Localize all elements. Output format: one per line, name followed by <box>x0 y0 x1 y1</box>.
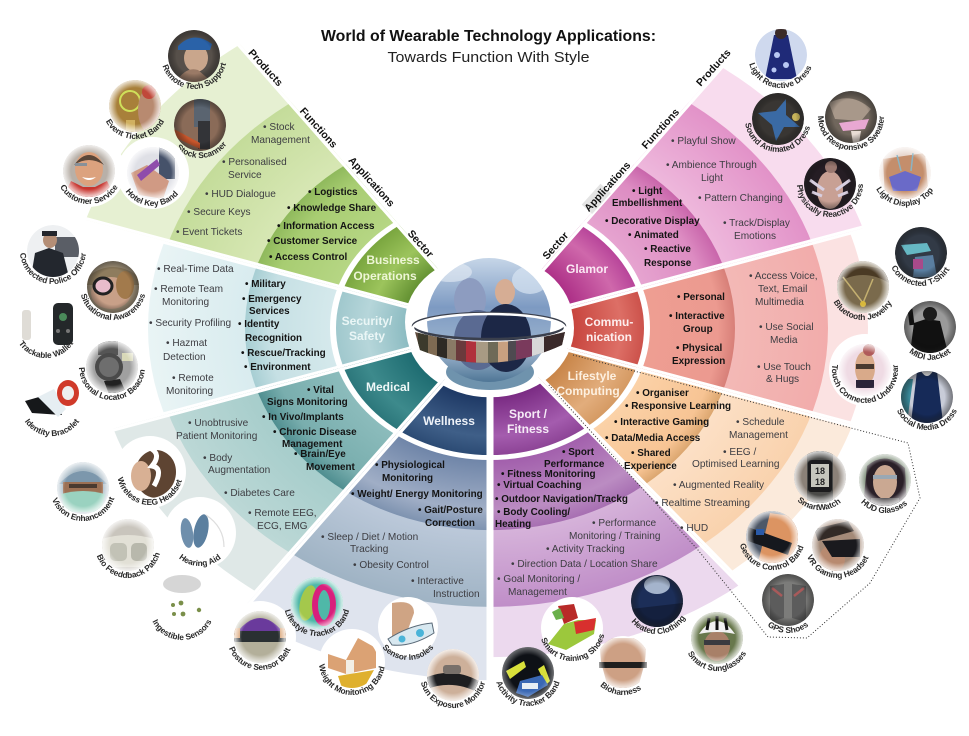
product: sound animated dress: Sound Animated Dress <box>746 122 810 152</box>
text: lifestyle functions <box>655 417 788 534</box>
product: sound animated dress <box>746 93 810 152</box>
text: glamor applications: • Decorative Display <box>605 216 700 227</box>
product: trackable wallet: Trackable Wallet <box>20 340 74 358</box>
product: ingestible sensors: Ingestible Sensors <box>152 619 212 640</box>
text: sport functions <box>497 518 660 598</box>
text: sport applications: Heating <box>495 519 531 530</box>
product: event ticket band: Event Ticket Band <box>106 118 164 140</box>
rings: lifestyle <box>538 350 852 570</box>
product: bio feedback patch <box>96 519 160 578</box>
text: sport functions: Monitoring / Training <box>569 531 660 542</box>
rings: sport <box>494 384 738 657</box>
product: hud glasses: HUD Glasses <box>861 498 907 513</box>
text: lifestyle functions: • HUD <box>680 523 708 534</box>
product: mood responsive sweater <box>818 91 884 150</box>
text: business functions: Service <box>228 170 262 181</box>
product: light display top: Light Display Top <box>876 186 933 208</box>
product: heated clothing <box>631 575 686 634</box>
product: social media dress: Social Media Dress <box>898 408 956 430</box>
text: medical applications: • Chronic Disease <box>273 427 357 438</box>
text: sport applications <box>495 447 628 530</box>
text: glamor functions: Light <box>701 173 723 184</box>
text: security applications: • Military <box>245 279 286 290</box>
text: security applications: • Rescue/Tracking <box>241 348 326 359</box>
product: gps shoes: GPS Shoes <box>768 622 808 633</box>
product: light display top <box>876 147 933 208</box>
product: hud glasses <box>859 454 911 513</box>
product: lifestyle tracker band: Lifestyle Tracker Band <box>285 609 350 636</box>
product: gesture control band <box>740 511 804 570</box>
text: security applications <box>238 279 326 373</box>
product: hotel key band <box>120 137 189 209</box>
text: business functions: • Personalised <box>222 157 287 168</box>
product: identity bracelet <box>24 380 80 438</box>
heading: sector communication: Commu- <box>585 315 633 329</box>
products: communication <box>829 227 956 430</box>
text: sport functions: Management <box>508 587 567 598</box>
text: wellness applications: • Physiological <box>375 460 445 471</box>
product: activity tracker band: Activity Tracker Band <box>496 680 560 706</box>
text: lifestyle applications <box>605 388 731 472</box>
product: smartwatch: 18 <box>815 477 825 487</box>
axis labels: Products <box>694 47 734 89</box>
text: sport applications: • Sport <box>562 447 595 458</box>
text: sport functions: • Activity Tracking <box>546 544 625 555</box>
text: security applications: • Environment <box>244 362 311 373</box>
product: situational awareness: Situational Awareness <box>81 294 145 320</box>
product: connected police officer: Connected Police Officer <box>20 252 86 284</box>
text: medical applications <box>262 385 357 473</box>
product: hotel key band: Hotel Key Band <box>126 188 178 208</box>
title: World of Wearable Technology Applications: <box>321 28 656 45</box>
heading: sector glamor: Glamor <box>566 262 608 276</box>
text: sport applications: • Virtual Coaching <box>497 480 581 491</box>
text: business functions: • HUD Dialogue <box>205 189 276 200</box>
heading: sector security: Security/ <box>342 314 393 328</box>
product: personal locator beacon: Personal Locator Beacon <box>78 368 145 400</box>
product: remote tech support <box>162 30 226 89</box>
text: security functions: • Remote Team <box>154 284 223 295</box>
text: glamor functions: • Track/Display <box>723 218 791 229</box>
text: business applications: • Logistics <box>308 187 358 198</box>
text: business functions: • Secure Keys <box>187 207 251 218</box>
heading: sector security <box>342 314 393 343</box>
heading: sector lifestyle <box>556 369 620 398</box>
product: bioharness <box>599 636 647 696</box>
product: connected t-shirt: Connected T-Shirt <box>892 266 950 286</box>
products: wellness <box>229 577 485 708</box>
product: smart sunglasses <box>688 612 746 672</box>
text: wellness functions: • Sleep / Diet / Motion <box>321 532 418 543</box>
text: communication functions: • Use Social <box>759 322 814 333</box>
heading: sector communication <box>585 315 633 344</box>
product: wireless eeg headset: Wireless EEG Headset <box>118 476 182 505</box>
product: weight monitoring band <box>319 629 385 695</box>
heading: sector communication: nication <box>586 330 632 344</box>
products: glamor <box>746 29 933 218</box>
text: glamor applications <box>605 186 700 269</box>
product: posture sensor belt: Posture Sensor Belt <box>229 646 290 670</box>
text: sport applications: • Body Cooling/ <box>497 507 570 518</box>
rings: glamor <box>542 67 862 306</box>
text: glamor applications: Response <box>644 258 692 269</box>
panel: security and safety <box>148 242 410 412</box>
text: business applications: • Information Access <box>277 221 375 232</box>
title: Towards Function With Style <box>388 49 590 66</box>
text: security functions: • Security Profiling <box>149 318 231 329</box>
text: sport applications: Performance <box>544 459 605 470</box>
text: medical applications: • Brain/Eye <box>294 449 346 460</box>
axis labels <box>246 47 734 262</box>
text: security applications: • Identity <box>238 319 280 330</box>
axis labels: Products <box>246 47 285 89</box>
axis labels: Applications <box>582 159 633 214</box>
product: midi jacket <box>904 301 956 360</box>
text: lifestyle functions: Optimised Learning <box>692 459 780 470</box>
text: sport functions: • Performance <box>592 518 657 529</box>
outline: lifestyle products dotted border <box>548 355 920 638</box>
text: glamor applications: • Reactive <box>644 244 691 255</box>
product: ingestible sensors <box>152 575 212 640</box>
text: medical functions: • Unobtrusive <box>188 418 249 429</box>
text: wellness applications <box>351 460 483 529</box>
heading: sector lifestyle: Lifestyle <box>568 369 617 383</box>
text: security functions <box>149 264 234 397</box>
text: communication applications: Group <box>683 324 713 335</box>
product: bluetooth jewelry <box>834 261 892 320</box>
text: communication functions: • Use Touch <box>757 362 811 373</box>
product: weight monitoring band: Weight Monitoring Band <box>319 664 385 695</box>
text: security functions: Detection <box>163 352 206 363</box>
rings: security <box>148 242 410 412</box>
axis labels: Sector <box>540 230 571 262</box>
product: vr gaming headset: VR Gaming Headset <box>808 554 868 580</box>
product: vision enhancement <box>52 462 118 521</box>
heading: sector sport: Sport / <box>509 407 548 421</box>
panel: business operations <box>86 46 438 306</box>
heading: sector business operations: Operations <box>353 269 417 283</box>
rings: business operations <box>86 46 438 306</box>
products: medical <box>52 436 236 640</box>
product: vision enhancement: Vision Enhancement <box>52 496 114 521</box>
text: lifestyle functions: • Augmented Reality <box>673 480 765 491</box>
product: mood responsive sweater: Mood Responsive Sweater <box>818 116 884 150</box>
text: wellness applications: • Weight/ Energy Monitoring <box>351 489 483 500</box>
text: wellness applications: Correction <box>425 518 475 529</box>
text: business functions: • Stock <box>263 122 296 133</box>
product: gesture control band: Gesture Control Band <box>740 544 804 570</box>
product: sun exposure monitor: Sun Exposure Monitor <box>421 681 485 708</box>
text: business applications: • Knowledge Share <box>287 203 377 214</box>
text: wellness functions: • Interactive <box>411 576 464 587</box>
product: sensor insoles: Sensor Insoles <box>383 644 434 660</box>
heading: sector sport: Fitness <box>507 422 549 436</box>
text: glamor functions: • Pattern Changing <box>698 193 783 204</box>
text: wellness functions: Tracking <box>350 544 388 555</box>
product: midi jacket: MIDI Jacket <box>909 348 951 360</box>
product: smartwatch: 18 <box>815 466 825 476</box>
product: vr gaming headset <box>808 519 868 580</box>
rings: medical <box>114 348 440 590</box>
text: lifestyle applications: • Interactive Gaming <box>614 417 709 428</box>
text: business applications <box>267 187 377 263</box>
text: lifestyle applications: • Responsive Learning <box>625 401 731 412</box>
axis labels: Functions <box>640 106 682 152</box>
text: communication functions: Multimedia <box>755 297 804 308</box>
product: customer service: Customer Service <box>61 184 118 204</box>
text: communication functions <box>749 271 818 385</box>
heading: sector business operations <box>353 253 420 283</box>
text: medical functions: • Body <box>203 453 233 464</box>
panel: wellness <box>253 380 486 680</box>
product: lifestyle tracker band <box>285 577 350 636</box>
text: sport functions: • Goal Monitoring / <box>497 574 580 585</box>
text: wellness functions <box>321 532 480 600</box>
axis labels: Applications <box>346 155 397 210</box>
panel: lifestyle computing <box>538 350 852 570</box>
heading: sector sport <box>507 407 549 436</box>
product: touch connected underwear <box>829 334 898 405</box>
product: hearing aid: Hearing Aid <box>179 554 221 568</box>
text: glamor applications: • Animated <box>628 230 679 241</box>
panel: communication <box>566 234 868 422</box>
product: bio feedback patch: Bio Feeddback Patch <box>96 552 160 578</box>
product: light reactive dress <box>749 29 812 88</box>
text: lifestyle applications: • Data/Media Access <box>605 433 701 444</box>
product: smart training shoes: Smart Training Shoes <box>542 634 604 662</box>
rings: communication <box>566 234 868 422</box>
text: glamor functions: • Playful Show <box>671 136 736 147</box>
heading: sector security: Safety <box>349 329 385 343</box>
product: posture sensor belt <box>229 601 296 670</box>
text: business applications: • Access Control <box>269 252 348 263</box>
product: smart training shoes <box>541 597 604 662</box>
heading: sector medical: Medical <box>366 380 410 394</box>
products: security and safety <box>20 225 145 438</box>
text: lifestyle applications: • Organiser <box>636 388 689 399</box>
text: business functions: • Event Tickets <box>176 227 242 238</box>
heading: sector lifestyle: Computing <box>556 384 620 398</box>
text: business functions <box>176 122 310 238</box>
product: stock scanner <box>174 99 226 158</box>
products: sport and fitness <box>496 575 746 706</box>
product: sun exposure monitor <box>421 649 485 708</box>
text: security functions: • Real-Time Data <box>157 264 234 275</box>
text: communication applications <box>669 292 725 367</box>
heading: sector wellness: Wellness <box>423 414 475 428</box>
product: gps shoes <box>762 574 814 633</box>
text: communication applications: Expression <box>672 356 725 367</box>
product: touch connected underwear: Touch Connected Underwear <box>832 364 898 403</box>
text: security applications: Recognition <box>245 333 302 344</box>
product: personal locator beacon <box>78 341 145 400</box>
axis labels: Functions <box>297 105 340 151</box>
text: medical functions: Patient Monitoring <box>176 431 257 442</box>
product: remote tech support: Remote Tech Support <box>162 62 226 89</box>
product: heated clothing: Heated Clothing <box>632 616 686 634</box>
text: lifestyle applications: • Shared <box>631 448 671 459</box>
product: bluetooth jewelry: Bluetooth Jewelry <box>834 300 892 320</box>
product: smartwatch <box>794 451 846 510</box>
text: lifestyle applications: Experience <box>624 461 677 472</box>
panel: medical <box>114 348 440 590</box>
text: communication functions: Media <box>770 335 798 346</box>
text: medical functions: • Diabetes Care <box>224 488 295 499</box>
product: bioharness: Bioharness <box>600 682 641 696</box>
product: social media dress <box>898 371 956 430</box>
text: sport applications: • Outdoor Navigation/Trackg <box>495 494 628 505</box>
text: medical applications: Movement <box>306 462 356 473</box>
text: security applications: • Emergency <box>242 294 302 305</box>
text: glamor applications: • Light <box>632 186 663 197</box>
text: medical functions: ECG, EMG <box>257 521 308 532</box>
text: sport functions: • Direction Data / Location Share <box>511 559 658 570</box>
text: communication applications: • Physical <box>676 343 723 354</box>
text: glamor applications: Embellishment <box>612 198 683 209</box>
text: medical applications: Management <box>282 439 343 450</box>
panel: sport and fitness <box>494 384 738 657</box>
text: communication functions: • Access Voice, <box>749 271 818 282</box>
text: medical functions <box>176 418 317 532</box>
product: smartwatch: SmartWatch <box>798 497 841 510</box>
title <box>321 28 656 66</box>
text: communication applications: • Personal <box>677 292 725 303</box>
text: medical functions: Augmentation <box>208 465 270 476</box>
heading: sector business operations: Business <box>366 253 420 267</box>
text: lifestyle functions: • Realtime Streaming <box>655 498 750 509</box>
text: wellness functions: • Obesity Control <box>353 560 429 571</box>
text: security applications: Services <box>249 306 290 317</box>
text: glamor functions <box>666 136 791 242</box>
text: lifestyle functions: • EEG / <box>723 447 756 458</box>
text: business applications: • Customer Service <box>267 236 358 247</box>
product: hearing aid <box>168 497 236 568</box>
text: medical applications: Signs Monitoring <box>267 397 348 408</box>
product: wireless eeg headset <box>118 436 186 507</box>
text: medical functions: • Remote EEG, <box>248 508 317 519</box>
product: situational awareness <box>81 261 145 320</box>
text: glamor functions: Emotions <box>734 231 776 242</box>
text: communication applications: • Interactive <box>669 311 725 322</box>
product: smart sunglasses: Smart Sunglasses <box>688 651 746 672</box>
text: sport applications: • Fitness Monitoring <box>501 469 596 480</box>
text: security functions: • Hazmat <box>166 338 207 349</box>
product: connected t-shirt <box>892 227 950 286</box>
text: wellness applications: • Gait/Posture <box>418 505 483 516</box>
product: identity bracelet: Identity Bracelet <box>24 418 80 438</box>
product: sensor insoles <box>378 597 438 660</box>
text: communication functions: & Hugs <box>766 374 799 385</box>
product: stock scanner: Stock Scanner <box>178 142 226 158</box>
text: medical applications: • In Vivo/Implants <box>262 412 344 423</box>
panel: glamor <box>542 67 862 306</box>
text: security functions: Monitoring <box>162 297 209 308</box>
rings: wellness <box>253 380 486 680</box>
text: wellness applications: Monitoring <box>382 473 433 484</box>
text: wellness functions: Instruction <box>433 589 480 600</box>
product: physically reactive dress: Physically Reactive Dress <box>796 184 863 218</box>
product: physically reactive dress <box>796 158 863 218</box>
product: connected police officer <box>20 225 86 284</box>
product: customer service <box>61 145 122 207</box>
product: trackable wallet <box>20 303 74 358</box>
text: security functions: • Remote <box>172 373 214 384</box>
product: light reactive dress: Light Reactive Dress <box>749 62 812 88</box>
products: business operations <box>61 30 226 209</box>
product: event ticket band <box>106 80 164 140</box>
text: business functions: Management <box>251 135 310 146</box>
axis labels: Sector <box>405 228 436 260</box>
products: lifestyle computing <box>740 451 911 633</box>
text: glamor functions: • Ambience Through <box>666 160 757 171</box>
central globe <box>405 254 573 390</box>
text: security functions: Monitoring <box>166 386 213 397</box>
text: lifestyle functions: Management <box>729 430 788 441</box>
product: activity tracker band <box>496 647 560 706</box>
text: lifestyle functions: • Schedule <box>736 417 785 428</box>
text: communication functions: Text, Email <box>758 284 807 295</box>
text: medical applications: • Vital <box>307 385 334 396</box>
